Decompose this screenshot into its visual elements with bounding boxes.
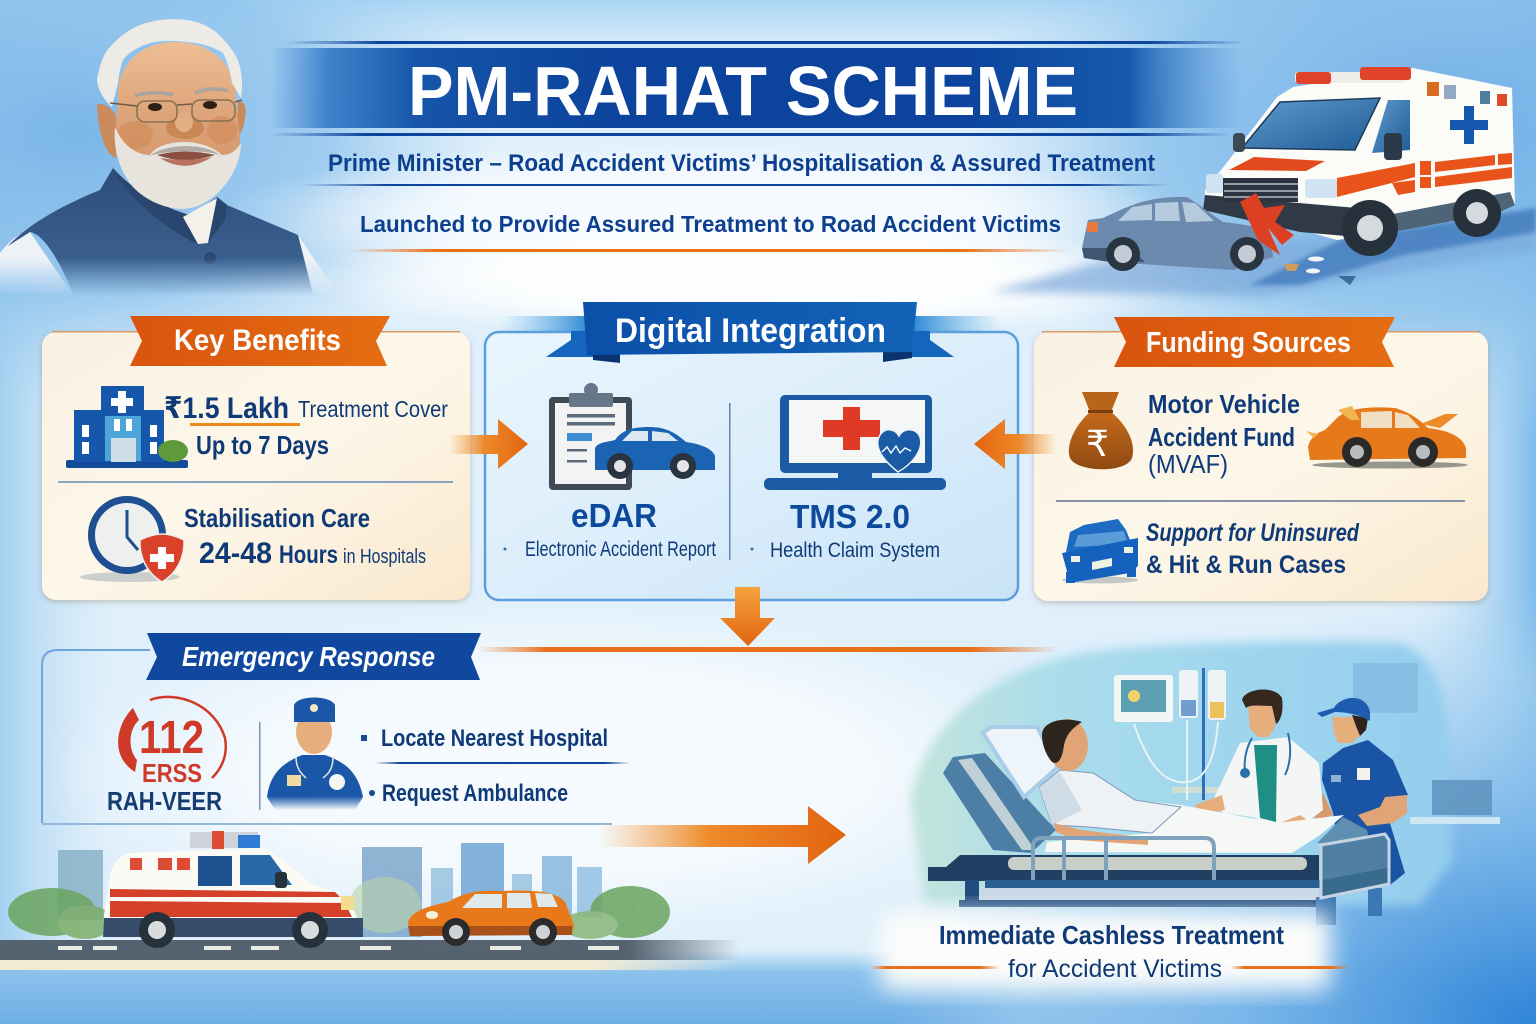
icon: clock with shield	[80, 496, 184, 582]
action: request ambulance: Request Ambulance	[382, 780, 568, 807]
care caption: for Accident Victims	[1008, 955, 1222, 983]
digital integration ribbon: Digital Integration	[615, 312, 886, 350]
icon: hospital	[66, 386, 188, 468]
accident illustration: ambulance and car	[990, 67, 1536, 296]
panel: funding sources	[1034, 317, 1488, 601]
funding sources ribbon: Funding Sources	[1146, 327, 1351, 359]
icon: tms laptop with heart	[764, 395, 946, 490]
uninsured support text: & Hit & Run Cases	[1146, 551, 1346, 579]
arrow: funding to digital	[974, 419, 1057, 469]
patient bed	[928, 727, 1370, 907]
room backdrop	[910, 642, 1452, 905]
launch tagline: Launched to Provide Assured Treatment to Road Accident Victims	[360, 211, 1061, 237]
benefit: treatment cover	[164, 392, 448, 460]
key benefits ribbon: Key Benefits	[174, 324, 341, 357]
arrow: benefits to digital	[449, 419, 528, 469]
mvaf text: Accident Fund	[1148, 422, 1295, 452]
tms label: TMS 2.0	[790, 498, 910, 535]
icon: blue car front	[1062, 519, 1138, 584]
doctor	[1195, 690, 1323, 832]
wall fittings	[1172, 663, 1500, 824]
uninsured support text: Support for Uninsured	[1146, 519, 1360, 547]
icon: edar clipboard with car	[549, 383, 715, 490]
bed footboard	[1316, 834, 1389, 925]
funding sources ribbon	[1114, 317, 1395, 367]
mvaf text: Motor Vehicle	[1148, 389, 1300, 419]
portrait illustration	[0, 19, 335, 298]
mvaf text: (MVAF)	[1148, 449, 1228, 479]
patient	[1039, 719, 1344, 853]
tms label	[750, 498, 940, 562]
benefit: stabilisation care	[184, 503, 426, 570]
bed side rail	[1033, 838, 1214, 880]
benefit: stabilisation care: Stabilisation Care	[184, 503, 370, 533]
iv monitor and bags	[1114, 668, 1226, 800]
key benefits ribbon	[130, 316, 390, 366]
arrow: digital down to emergency	[720, 587, 775, 646]
title text: PM-RAHAT SCHEME	[408, 52, 1078, 130]
action: locate nearest hospital: Locate Nearest Hospital	[381, 725, 608, 752]
city skyline	[58, 843, 602, 937]
icon: 112 erss badge: ERSS	[142, 758, 202, 788]
uninsured support text	[1146, 519, 1360, 579]
benefit: treatment cover: Up to 7 Days	[196, 430, 329, 460]
icon: damaged orange car	[1306, 406, 1468, 468]
orange car on road	[408, 891, 574, 946]
benefit: treatment cover: ₹1.5 Lakh	[164, 392, 289, 425]
road	[0, 940, 740, 970]
icon: 112 erss badge: RAH-VEER	[107, 786, 222, 816]
edar label: eDAR	[571, 497, 657, 534]
benefit: stabilisation care: Hours	[279, 541, 338, 569]
care caption	[870, 912, 1350, 990]
icon: money bag: ₹	[1086, 424, 1109, 465]
head	[97, 19, 246, 209]
subtitle rule	[300, 184, 1170, 186]
tagline rule	[350, 249, 1070, 252]
nurse	[1313, 698, 1408, 885]
icon: 112 erss badge	[107, 697, 226, 816]
portrait clothing	[0, 168, 335, 298]
hospital care illustration	[910, 642, 1500, 925]
panel: digital integration	[485, 302, 1018, 600]
emergency response ribbon: Emergency Response	[182, 641, 435, 672]
title banner	[270, 41, 1245, 136]
emergency response ribbon	[146, 633, 481, 680]
ambulance on road	[103, 831, 363, 948]
benefit: stabilisation care: in Hospitals	[343, 546, 426, 568]
edar label	[504, 497, 716, 561]
edar label: Electronic Accident Report	[525, 538, 716, 561]
benefit: stabilisation care: 24-48	[199, 537, 272, 570]
benefit: treatment cover: Treatment Cover	[298, 396, 448, 422]
icon: money bag	[1069, 392, 1133, 469]
tms label: Health Claim System	[770, 539, 940, 562]
panel: emergency response	[0, 633, 1058, 970]
digital integration ribbon	[500, 302, 1002, 363]
panel: key benefits	[42, 316, 470, 600]
icon: rah-veer responder	[267, 698, 363, 810]
arrow: emergency to treatment	[598, 806, 846, 864]
care caption: Immediate Cashless Treatment	[939, 920, 1284, 950]
subtitle: Prime Minister – Road Accident Victims’ Hospitalisation & Assured Treatment	[328, 150, 1155, 177]
mvaf text	[1148, 389, 1300, 479]
icon: 112 erss badge: 112	[139, 711, 204, 763]
roadside trees	[8, 877, 670, 939]
